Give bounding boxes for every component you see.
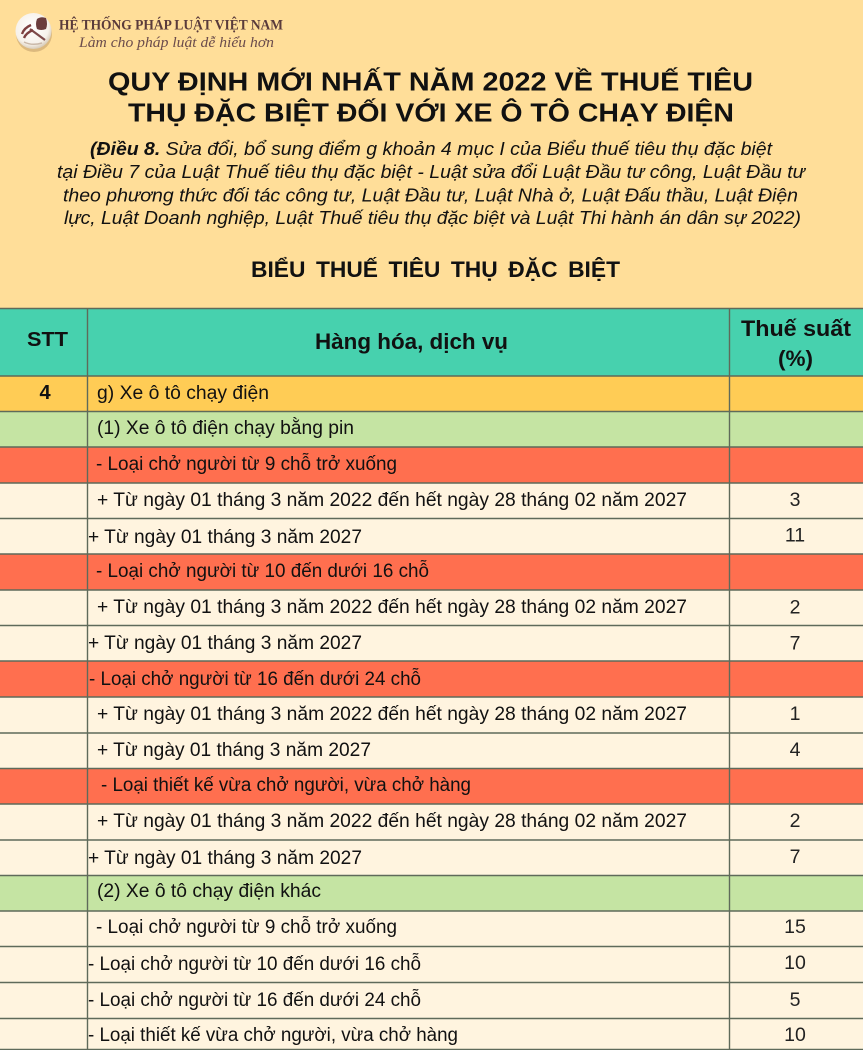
row: 9 seats or fewer <box>0 447 863 483</box>
title: THỤ ĐẶC BIỆT ĐỐI VỚI XE Ô TÔ CHẠY ĐIỆN <box>128 98 734 128</box>
legal citation text block: lực, Luật Doanh nghiệp, Luật Thuế tiêu thụ đặc biệt và Luật Thi hành án dân sự 2022) <box>64 208 801 228</box>
row: from 2027 rate 4: + Từ ngày 01 tháng 3 năm 2027 <box>97 740 371 761</box>
tax rate table <box>0 308 863 1050</box>
table header row: STT <box>27 329 68 351</box>
row: other, passenger and cargo rate 10: - Loại thiết kế vừa chở người, vừa chở hàng <box>88 1025 458 1046</box>
row: section 4: 4 <box>39 382 51 404</box>
row: 2022 to 2027 rate 2: 2 <box>790 596 800 618</box>
row: other, 9 seats or fewer rate 15: 15 <box>784 916 806 938</box>
row: other electric cars <box>0 876 863 911</box>
row: 10 to under 16 seats <box>0 554 863 590</box>
icon: gavel badge <box>16 13 52 52</box>
logo tagline: Làm cho pháp luật dễ hiểu hơn <box>78 35 274 51</box>
row: from 2027 rate 11: + Từ ngày 01 tháng 3 năm 2027 <box>88 527 362 548</box>
row: 2022 to 2027 rate 2: + Từ ngày 01 tháng 3 năm 2022 đến hết ngày 28 tháng 02 năm 2027 <box>97 811 687 832</box>
row: other electric cars: (2) Xe ô tô chạy điện khác <box>97 881 321 902</box>
row: 2022 to 2027 rate 1: + Từ ngày 01 tháng 3 năm 2022 đến hết ngày 28 tháng 02 năm 2027 <box>97 704 687 725</box>
row: other, 9 seats or fewer rate 15: - Loại chở người từ 9 chỗ trở xuống <box>96 916 397 938</box>
table header row: (%) <box>778 346 813 371</box>
legal citation text block: theo phương thức đối tác công tư, Luật Đầu tư, Luật Nhà ở, Luật Đấu thầu, Luật Điện <box>63 186 798 206</box>
table header row: Hàng hóa, dịch vụ <box>315 329 508 354</box>
row: from 2027 rate 11: 11 <box>785 525 805 547</box>
row: from 2027 rate 7 <box>0 626 863 661</box>
row: 2022 to 2027 rate 3: 3 <box>790 489 800 511</box>
row: 2022 to 2027 rate 2: 2 <box>790 810 800 832</box>
title <box>108 66 753 128</box>
row: from 2027 rate 11 <box>0 518 863 554</box>
row: from 2027 rate 4 <box>0 733 863 768</box>
row: other, 10 to under 16 seats rate 10: - Loại chở người từ 10 đến dưới 16 chỗ <box>88 953 421 975</box>
row: 2022 to 2027 rate 1: 1 <box>790 703 800 725</box>
row: other, passenger and cargo rate 10: 10 <box>784 1024 806 1046</box>
row: passenger and cargo <box>0 768 863 804</box>
row: other, 10 to under 16 seats rate 10 <box>0 946 863 982</box>
row: 16 to under 24 seats <box>0 661 863 697</box>
title: QUY ĐỊNH MỚI NHẤT NĂM 2022 VỀ THUẾ TIÊU <box>108 66 753 96</box>
row: battery electric cars <box>0 412 863 447</box>
row: 9 seats or fewer: - Loại chở người từ 9 chỗ trở xuống <box>96 453 397 475</box>
row: other, 16 to under 24 seats rate 5: - Loại chở người từ 16 đến dưới 24 chỗ <box>88 989 421 1011</box>
legal citation text block <box>57 139 807 228</box>
row: other, passenger and cargo rate 10 <box>0 1018 863 1050</box>
legal citation text block: (Điều 8. Sửa đổi, bổ sung điểm g khoản 4 mục I của Biểu thuế tiêu thụ đặc biệt <box>90 139 773 159</box>
row: 2022 to 2027 rate 2: + Từ ngày 01 tháng 3 năm 2022 đến hết ngày 28 tháng 02 năm 2027 <box>97 597 687 618</box>
row: from 2027 rate 7: 7 <box>790 632 800 654</box>
row: battery electric cars: (1) Xe ô tô điện chạy bằng pin <box>97 417 354 439</box>
row: other, 16 to under 24 seats rate 5 <box>0 982 863 1018</box>
row: from 2027 rate 7: + Từ ngày 01 tháng 3 năm 2027 <box>88 633 362 654</box>
row: 2022 to 2027 rate 2 <box>0 590 863 626</box>
row: other, 16 to under 24 seats rate 5: 5 <box>790 989 801 1011</box>
table header row <box>0 308 863 376</box>
row: from 2027 rate 7 <box>0 840 863 876</box>
row: section 4 <box>0 376 863 412</box>
row: from 2027 rate 7: 7 <box>790 846 800 868</box>
legal citation text block: tại Điều 7 của Luật Thuế tiêu thụ đặc biệt - Luật sửa đổi Luật Đầu tư công, Luật Đầu tư <box>57 162 807 182</box>
table header row: Thuế suất <box>741 316 852 341</box>
row: 2022 to 2027 rate 3 <box>0 483 863 518</box>
row: 2022 to 2027 rate 3: + Từ ngày 01 tháng 3 năm 2022 đến hết ngày 28 tháng 02 năm 2027 <box>97 490 687 511</box>
row: from 2027 rate 7: + Từ ngày 01 tháng 3 năm 2027 <box>88 848 362 869</box>
logo name: HỆ THỐNG PHÁP LUẬT VIỆT NAM <box>59 16 283 34</box>
row: section 4: g) Xe ô tô chạy điện <box>97 383 269 404</box>
logo: law system brand <box>16 13 283 52</box>
row: 2022 to 2027 rate 1 <box>0 697 863 733</box>
row: other, 9 seats or fewer rate 15 <box>0 911 863 946</box>
row: 16 to under 24 seats: - Loại chở người từ 16 đến dưới 24 chỗ <box>89 668 421 690</box>
row: 10 to under 16 seats: - Loại chở người từ 10 đến dưới 16 chỗ <box>96 560 429 582</box>
table heading: BIỂU THUẾ TIÊU THỤ ĐẶC BIỆT <box>251 257 621 282</box>
row: passenger and cargo: - Loại thiết kế vừa chở người, vừa chở hàng <box>101 775 471 796</box>
row: other, 10 to under 16 seats rate 10: 10 <box>784 952 806 974</box>
row: 2022 to 2027 rate 2 <box>0 804 863 840</box>
row: from 2027 rate 4: 4 <box>790 739 801 761</box>
